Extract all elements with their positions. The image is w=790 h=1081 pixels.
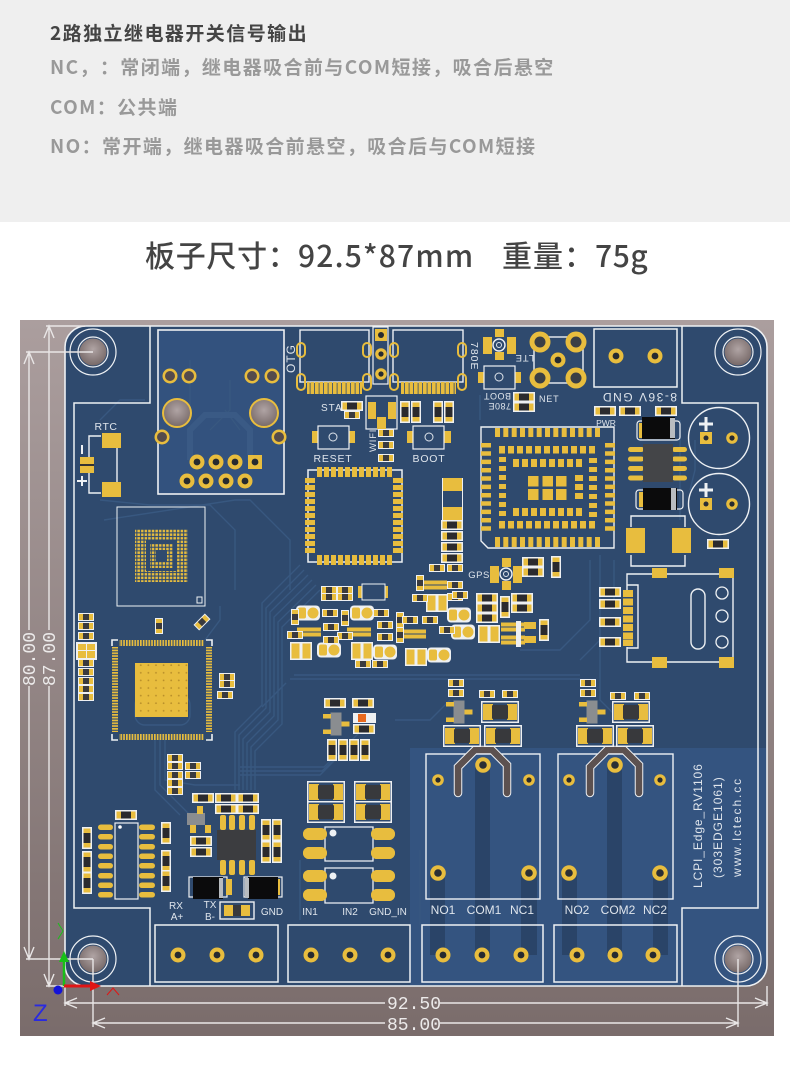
- small resistor columns: [167, 754, 201, 795]
- connector labels: NC1: [510, 903, 534, 917]
- photo backdrop: [20, 320, 774, 1036]
- heading: board size and weight: 板子尺寸：: [145, 232, 298, 276]
- 4G module footprint: [481, 427, 615, 548]
- connector labels: NC2: [643, 903, 667, 917]
- vertical board marking: [691, 763, 744, 888]
- connector labels: RX: [169, 901, 183, 912]
- dimension: 92.50: 92.50: [387, 995, 441, 1015]
- connector labels: TX: [204, 900, 217, 911]
- connector labels: COM1: [467, 903, 502, 917]
- GPS antenna connector: [468, 556, 561, 590]
- 780E boot button: BOOT: [483, 391, 511, 401]
- heading: board size and weight: 92.5*87mm: [298, 232, 474, 276]
- dimension: 92.50: [65, 986, 767, 1015]
- mounting holes: [70, 329, 761, 982]
- inductor L8: [626, 516, 729, 566]
- LTE antenna connector: LTE: [515, 352, 534, 363]
- dimension: 87.00: 87.00: [41, 632, 61, 686]
- dimension: 85.00: [93, 959, 738, 1036]
- status LED and wifi section: STA: [321, 403, 343, 414]
- BOOT button: [400, 401, 454, 465]
- status LED and wifi section: [321, 396, 397, 462]
- copper traces: [100, 360, 695, 925]
- XYZ axis triad: [33, 923, 119, 1027]
- dimension: 80.00: [21, 352, 93, 959]
- drive transistor cluster: [323, 698, 376, 761]
- power terminal J3: PWR: [596, 418, 616, 428]
- connector labels: GND: [261, 907, 283, 918]
- panel: relay terminal description: [0, 0, 790, 222]
- text: NC description: NC，：常闭端，继电器吸合前与COM短接，吸合后悬空: [50, 53, 555, 80]
- screw terminal J16: [155, 925, 278, 982]
- connector labels: COM2: [601, 903, 636, 917]
- USB connector OTG: [284, 330, 371, 394]
- status LED and wifi section: WIFI: [368, 429, 379, 452]
- relay driver 1: [443, 679, 522, 747]
- vertical board marking: (303EDGE1061): [711, 776, 725, 878]
- passives left of processor: [76, 613, 235, 701]
- screw terminal J12: [554, 925, 677, 982]
- pin header between USB ports: [373, 327, 388, 384]
- XYZ axis triad: Z: [33, 1000, 48, 1027]
- serial interface chip: [187, 793, 282, 919]
- SMA connector: [530, 332, 586, 388]
- LTE antenna connector: [483, 329, 534, 363]
- RTC battery footprint: [77, 421, 121, 497]
- dimension: 85.00: 85.00: [387, 1016, 441, 1036]
- relay K1: [426, 750, 540, 899]
- relay K2: [558, 750, 673, 899]
- optocouplers and input caps: [303, 781, 395, 903]
- text: COM description: COM：公共端: [50, 93, 178, 120]
- 780E boot button: NET: [539, 394, 559, 404]
- board outline: [65, 326, 767, 986]
- RTC battery footprint: RTC: [95, 421, 117, 433]
- relay copper bars: [430, 765, 668, 955]
- connector labels: B-: [205, 912, 215, 923]
- heading: relay outputs: 2路独立继电器开关信号输出: [50, 19, 308, 46]
- silkscreen board border: [74, 326, 758, 986]
- text: NO description: NO：常开端，继电器吸合前悬空，吸合后与COM短接: [50, 132, 536, 159]
- connector labels: A+: [171, 912, 183, 923]
- connector labels: NO1: [431, 903, 456, 917]
- heading: board size and weight: [145, 232, 648, 276]
- heading: board size and weight: 重量：: [502, 232, 595, 276]
- RESET button: RESET: [313, 453, 353, 465]
- capacitor and resistor stack: [441, 478, 463, 563]
- vertical board marking: www.lctech.cc: [730, 777, 744, 878]
- dimension: 80.00: 80.00: [21, 632, 41, 686]
- 780E boot button: 780E: [488, 401, 511, 411]
- main processor QFP: [112, 640, 212, 740]
- USB connector 780E: [390, 330, 480, 394]
- relay driver 2: [576, 679, 654, 747]
- vertical board marking: LCPI_Edge_RV1106: [691, 763, 705, 888]
- RESET button: [312, 426, 355, 465]
- main MCU QFN: [305, 467, 403, 565]
- USB connector OTG: OTG: [284, 344, 298, 373]
- GPS antenna connector: GPS: [468, 570, 490, 581]
- screw terminal J14: [288, 925, 410, 982]
- power terminal J3: 8-36V GND: [601, 390, 677, 404]
- heading: board size and weight: 75g: [595, 232, 648, 276]
- power regulator and diodes: [628, 417, 687, 510]
- BOOT button: BOOT: [413, 453, 445, 465]
- connector labels: NO2: [565, 903, 590, 917]
- 780E boot button: [478, 366, 559, 412]
- BGA memory footprint: [117, 507, 205, 606]
- connector labels: IN2: [342, 907, 358, 918]
- center power management passives: [287, 564, 549, 668]
- power terminal J3: [594, 329, 677, 428]
- SIM card socket: [599, 568, 734, 668]
- dimension: 87.00: [41, 326, 85, 986]
- ethernet connector: [154, 330, 286, 494]
- connector labels: [169, 900, 667, 923]
- connector labels: IN1: [302, 907, 318, 918]
- connector labels: GND_IN: [369, 907, 407, 918]
- screw terminal J11: [422, 925, 543, 982]
- RS485 interface chip J16: [82, 810, 171, 899]
- electrolytic capacitors: [688, 408, 750, 534]
- USB connector 780E: 780E: [468, 342, 480, 371]
